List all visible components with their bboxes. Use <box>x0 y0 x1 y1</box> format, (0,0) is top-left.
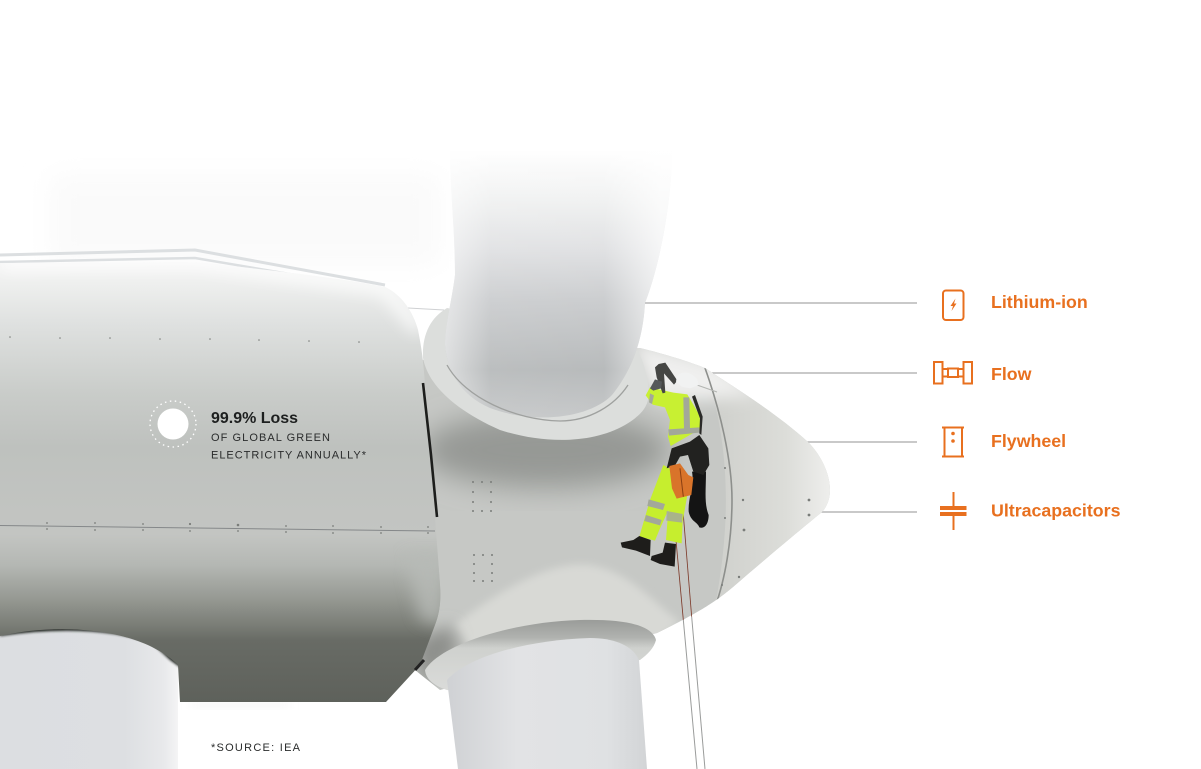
turbine: left tower <box>0 629 181 769</box>
icon: battery <box>943 290 964 320</box>
icon: dotted circle <box>150 401 196 447</box>
turbine: bottom blade <box>447 638 647 769</box>
stat description <box>211 432 367 462</box>
ropes <box>672 493 705 769</box>
turbine: top blade <box>445 150 672 421</box>
turbine: nacelle <box>0 260 445 702</box>
orange bag <box>669 463 693 499</box>
glove <box>650 379 662 391</box>
label: Flow <box>991 364 1032 384</box>
helmet <box>676 373 699 388</box>
turbine: bottom blade flange <box>425 620 656 692</box>
underside haze <box>190 702 290 708</box>
label: Ultracapacitors <box>991 500 1121 520</box>
source note: *SOURCE: IEA <box>211 742 301 754</box>
worker in hi-vis suit <box>621 363 709 769</box>
leader lines <box>645 303 917 512</box>
rivets <box>9 336 810 586</box>
tool <box>655 363 677 393</box>
icon: capacitor <box>940 492 966 530</box>
item: Lithium-ion <box>943 290 1088 320</box>
stat description: OF GLOBAL GREEN <box>211 432 330 444</box>
item: Flow <box>934 362 1032 384</box>
infographic canvas <box>0 177 1120 769</box>
boots <box>621 536 651 556</box>
stat heading: 99.9% Loss <box>211 410 298 427</box>
jacket <box>646 387 701 446</box>
item: Flywheel <box>942 428 1066 456</box>
turbine: hub and nose cone <box>415 340 835 690</box>
label: Lithium-ion <box>991 292 1088 312</box>
stat description: ELECTRICITY ANNUALLY* <box>211 450 367 462</box>
legs <box>639 465 687 543</box>
callout: global loss statistic <box>150 401 367 462</box>
harness <box>667 435 709 475</box>
icon: flywheel <box>942 428 964 456</box>
turbine: rear railing <box>0 250 444 310</box>
rope coil <box>689 472 709 528</box>
label: Flywheel <box>991 431 1066 451</box>
turbine: top blade flange <box>423 308 649 440</box>
background haze <box>50 175 440 265</box>
item: Ultracapacitors <box>940 492 1121 530</box>
icon: flow battery <box>934 362 972 384</box>
